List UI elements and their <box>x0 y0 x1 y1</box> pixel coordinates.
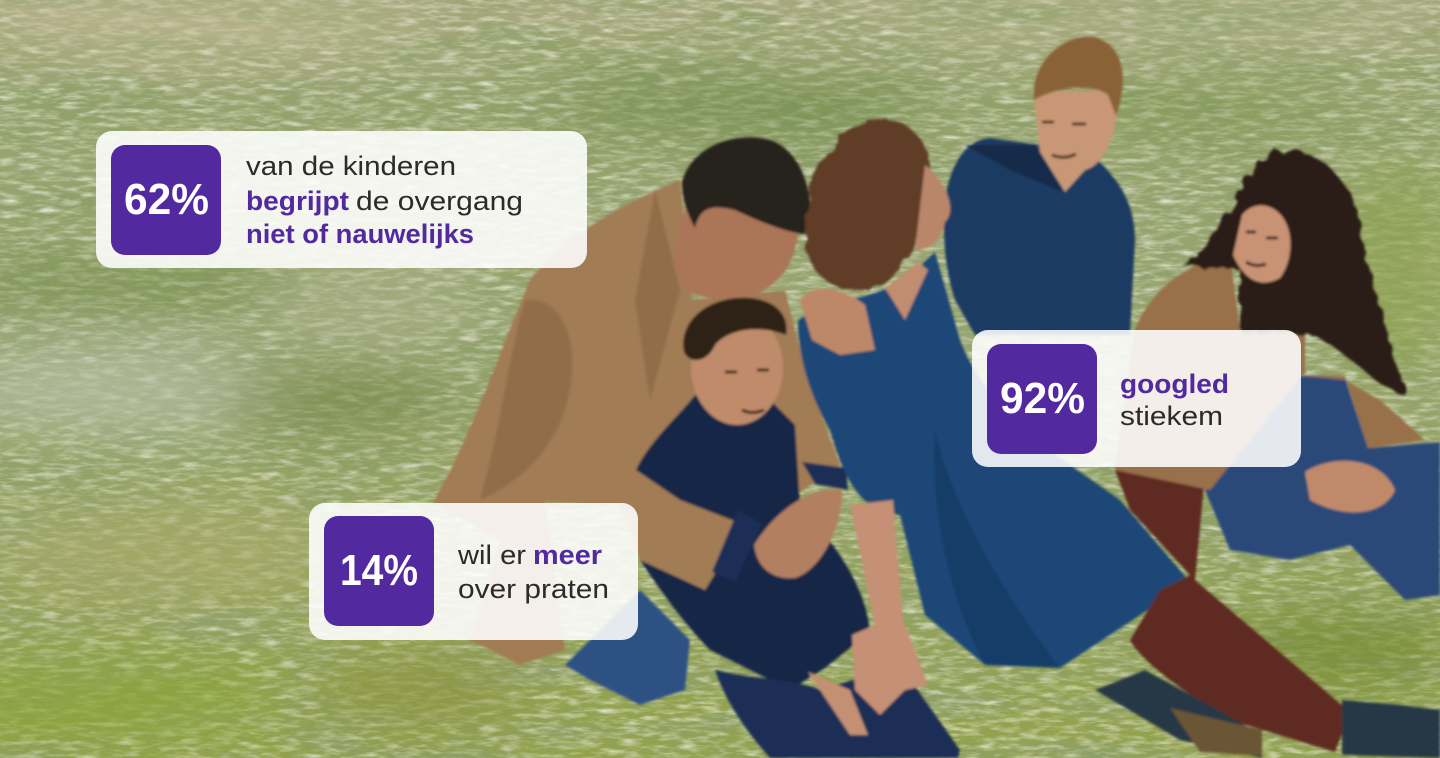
text: googled stiekem: stiekem <box>1120 401 1223 431</box>
girl's face <box>1233 205 1290 283</box>
badge: 92% <box>987 344 1097 454</box>
jacket cuffs <box>712 462 848 582</box>
boy's hand <box>808 672 868 735</box>
teen's face <box>1033 90 1118 192</box>
text: van de kinderen begrijpt de overgang niet of nauwelijks: begrijpt <box>246 186 349 216</box>
text: googled stiekem <box>1120 369 1229 431</box>
man's tan jacket <box>433 180 840 665</box>
girl's eyes and mouth <box>1246 232 1278 266</box>
girl's tan sweater <box>1115 255 1425 490</box>
text: wil er meer over praten: meer <box>533 540 603 570</box>
text: googled stiekem: googled <box>1120 369 1229 399</box>
badge: 62% <box>111 145 221 255</box>
woman's arm <box>850 500 928 715</box>
stat card: 14% <box>309 503 638 640</box>
woman's hand on man's shoulder <box>800 289 875 355</box>
stat card: 62% <box>96 131 587 268</box>
woman's curly hair <box>804 118 931 292</box>
teen's eyes and mouth <box>1042 122 1086 157</box>
dress fold shadow <box>934 430 1060 668</box>
man's jeans <box>565 590 690 705</box>
text: van de kinderen begrijpt de overgang niet of nauwelijks: niet of nauwelijks <box>246 219 474 249</box>
teen's hair <box>1034 36 1123 116</box>
man's dark hair <box>682 137 811 234</box>
woman's face <box>915 165 950 250</box>
woman's boots <box>1095 670 1440 758</box>
jacket shadow <box>480 190 680 500</box>
boy's head <box>691 311 783 425</box>
boy's hair <box>683 298 787 360</box>
girl's dark curly hair <box>1182 151 1405 395</box>
text: wil er meer over praten: wil er <box>457 540 526 570</box>
stat card: 92% <box>972 330 1301 467</box>
badge: 14%: 14% <box>340 546 418 595</box>
hoodie hood shadow <box>965 145 1063 192</box>
man's neck and face <box>676 195 798 299</box>
people in the photo <box>433 36 1440 758</box>
boy's jeans <box>715 665 960 758</box>
woman's burgundy tights <box>1115 470 1350 752</box>
text: van de kinderen begrijpt de overgang niet of nauwelijks <box>246 151 523 249</box>
badge: 62%: 62% <box>124 175 209 224</box>
girl's jeans <box>1205 376 1440 600</box>
woman's neck <box>885 262 928 320</box>
man's hand on boy <box>754 489 842 578</box>
card background <box>96 131 587 268</box>
boot sole <box>1170 708 1262 756</box>
boy's navy sweater <box>636 395 870 690</box>
teen's hoodie <box>944 138 1135 335</box>
boy's eyes and mouth <box>725 370 769 412</box>
woman's navy dress <box>798 252 1190 668</box>
girl's hands <box>1305 461 1395 512</box>
text: wil er meer over praten: over praten <box>458 574 609 604</box>
card background <box>309 503 638 640</box>
card background <box>972 330 1301 467</box>
badge: 14% <box>324 516 434 626</box>
text: wil er meer over praten <box>457 540 609 604</box>
text: van de kinderen begrijpt de overgang niet of nauwelijks: de overgang <box>356 186 523 216</box>
text: van de kinderen begrijpt de overgang niet of nauwelijks: van de kinderen <box>246 151 456 181</box>
badge: 92%: 92% <box>1000 374 1085 423</box>
